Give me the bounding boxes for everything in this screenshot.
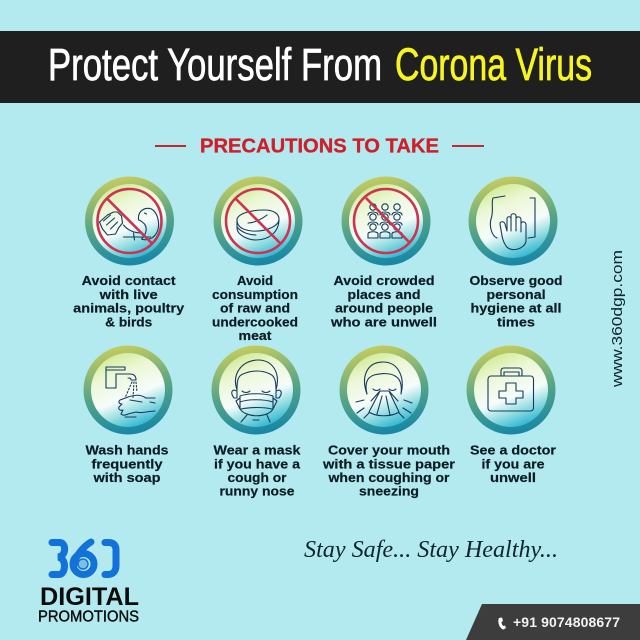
text: caption: Avoid contact bbox=[82, 273, 176, 288]
contact bar bbox=[466, 604, 640, 640]
panel: avoid crowded places bbox=[330, 176, 437, 330]
logo: 360 digital promotions: DIGITAL bbox=[40, 584, 139, 611]
text: caption: See a doctor bbox=[470, 442, 556, 457]
text: tagline: Stay Safe... Stay Healthy... bbox=[304, 537, 558, 563]
icon: hand and bird crossed out bbox=[85, 176, 174, 266]
text: caption: Wear a mask bbox=[214, 442, 301, 457]
logo: 360 digital promotions: PROMOTIONS bbox=[38, 608, 139, 626]
heading: precautions to take: PRECAUTIONS TO TAKE bbox=[200, 136, 439, 158]
panel: personal hygiene bbox=[468, 176, 563, 330]
text: caption: hygiene at all bbox=[470, 301, 562, 316]
panel: see a doctor bbox=[466, 346, 556, 485]
text: caption: Observe good bbox=[470, 273, 563, 288]
text: caption: Wash hands bbox=[86, 442, 168, 457]
text: caption: meat bbox=[238, 328, 272, 343]
icon: phone bbox=[498, 618, 506, 630]
panel: wash hands bbox=[84, 346, 172, 485]
text: caption: if you have a bbox=[214, 456, 301, 471]
icon: face with mask bbox=[212, 346, 300, 434]
panel: avoid contact with animals bbox=[73, 176, 185, 330]
text: caption: runny nose bbox=[220, 484, 294, 499]
text: caption: sneezing bbox=[359, 484, 419, 499]
text: caption: when coughing or bbox=[327, 470, 450, 485]
text: caption: unwell bbox=[490, 470, 536, 485]
icon: tap and washing hands bbox=[84, 346, 172, 434]
text: caption: Cover your mouth bbox=[328, 442, 450, 457]
text: caption: with live bbox=[99, 287, 158, 302]
panel: cover your mouth bbox=[322, 346, 455, 499]
panel: avoid raw meat bbox=[212, 176, 302, 343]
text: caption: undercooked bbox=[212, 315, 298, 330]
text: caption: with soap bbox=[92, 470, 161, 485]
text: caption: Avoid crowded bbox=[334, 273, 435, 288]
text: caption: around people bbox=[335, 301, 433, 316]
text: caption: places and bbox=[348, 287, 421, 302]
title banner: Protect Yourself From bbox=[48, 39, 382, 90]
text: caption: who are unwell bbox=[330, 315, 437, 330]
icon: first aid kit bbox=[466, 346, 556, 434]
text: caption: & birds bbox=[105, 315, 152, 330]
text: website vertical: www.360dgp.com bbox=[610, 250, 626, 388]
logo: 360 digital promotions bbox=[38, 542, 139, 626]
text: caption: times bbox=[497, 315, 535, 330]
icon: hand and towel bbox=[468, 176, 558, 266]
title banner bbox=[0, 31, 640, 103]
text: caption: Avoid bbox=[237, 273, 273, 288]
text: caption: of raw and bbox=[220, 301, 290, 316]
icon: meat crossed out bbox=[214, 176, 302, 266]
text: caption: frequently bbox=[92, 456, 163, 471]
icon: crowd crossed out bbox=[342, 176, 430, 266]
text: caption: if you are bbox=[482, 456, 544, 471]
text: caption: with a tissue paper bbox=[322, 456, 455, 471]
icon: face sneezing into tissue bbox=[340, 346, 428, 434]
text: caption: animals, poultry bbox=[73, 301, 185, 316]
contact bar: +91 9074808677 bbox=[513, 614, 620, 630]
text: caption: personal bbox=[486, 287, 546, 302]
panel: wear a mask bbox=[212, 346, 301, 499]
text: caption: cough or bbox=[228, 470, 286, 485]
text: caption: consumption bbox=[212, 287, 298, 302]
